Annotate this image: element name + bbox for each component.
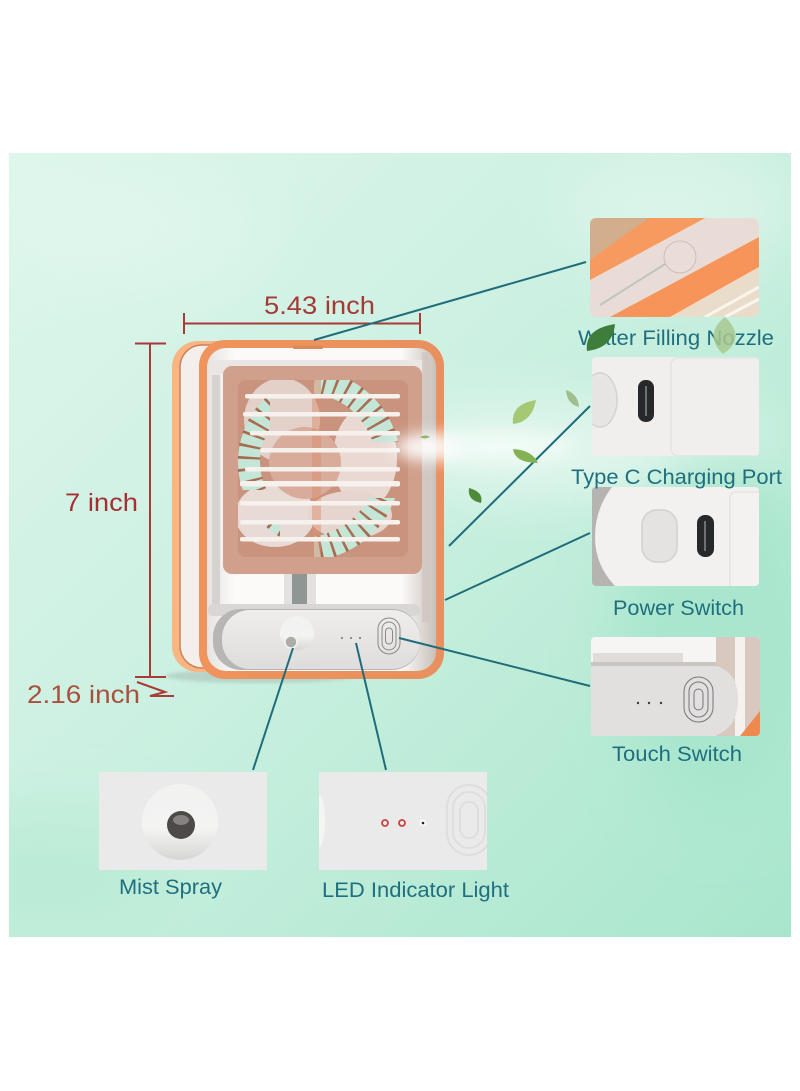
photo: touch switch (591, 637, 760, 736)
fan housing (223, 366, 422, 574)
transparent water tank (207, 348, 436, 671)
photo: power switch (592, 487, 759, 586)
leaf 4 (566, 390, 579, 407)
base shelf (208, 604, 420, 616)
leaf 1 (587, 324, 615, 351)
leader lines (253, 262, 590, 770)
bright jet (393, 436, 457, 458)
top nozzle tab (293, 346, 323, 349)
dimension: depth (27, 681, 174, 709)
background panel (0, 150, 800, 950)
label: power switch: Power Switch (613, 597, 744, 620)
support stem (284, 574, 316, 610)
product: mist fan (172, 340, 444, 679)
touch fingerprint icon (378, 618, 400, 654)
photo: mist spray (99, 772, 267, 870)
label: led indicator light: LED Indicator Light (322, 879, 509, 902)
leaf 3 (513, 400, 536, 424)
label: type c charging port: Type C Charging Port (571, 466, 782, 489)
fan window with blades (238, 380, 408, 557)
photo: type c port (583, 357, 763, 456)
leaf 7 (420, 436, 430, 438)
height value: 7 inch (65, 489, 138, 517)
louvre slats (240, 394, 400, 542)
dimension: height (65, 343, 166, 677)
leaf 2 (713, 317, 736, 354)
leaf 5 (513, 449, 538, 463)
photo: water filling nozzle (590, 217, 759, 317)
label: mist spray: Mist Spray (119, 876, 223, 899)
back orange shell (172, 341, 292, 672)
label: water filling nozzle: Water Filling Nozzle (578, 327, 774, 350)
photo: led indicator (313, 772, 491, 870)
indicator dots (341, 637, 361, 639)
control base (213, 609, 420, 670)
mist spray (393, 431, 575, 463)
width value: 5.43 inch (264, 292, 375, 320)
dimension: width (184, 292, 420, 334)
floating leaves (420, 317, 736, 503)
mist outlet (280, 616, 314, 650)
label: touch switch: Touch Switch (612, 743, 742, 766)
leaf 6 (469, 488, 482, 503)
device shadow (165, 669, 355, 683)
front orange frame (199, 340, 444, 679)
soft plume (405, 431, 575, 463)
depth value: 2.16 inch (27, 681, 140, 709)
